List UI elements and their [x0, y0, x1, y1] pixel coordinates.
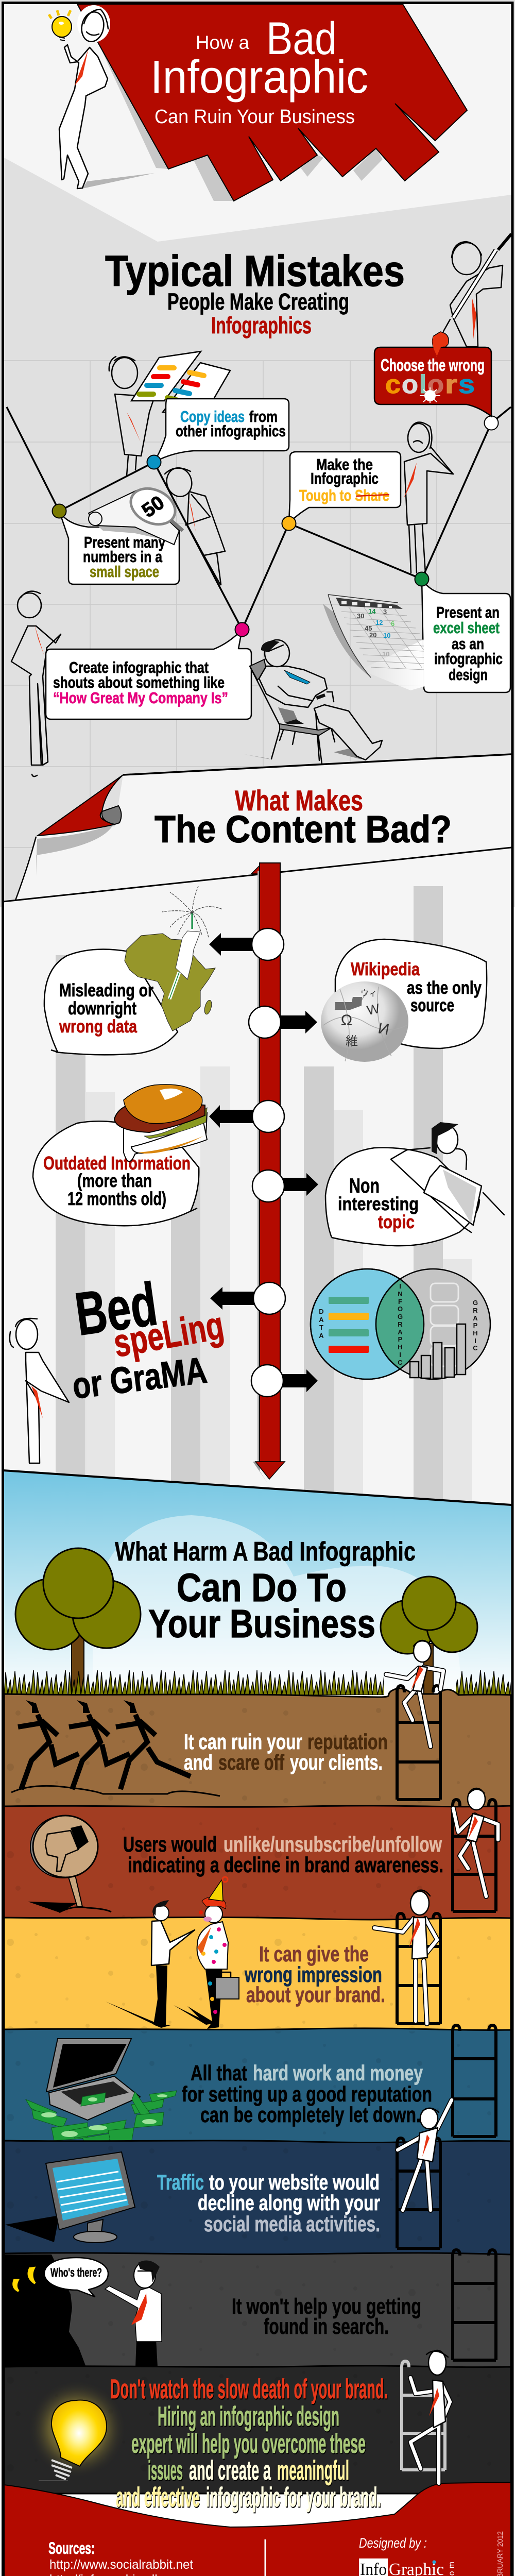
panel: content section background: [3, 848, 511, 1510]
icon: spreadsheet calendar: 14: [368, 607, 376, 615]
panel: what makes the content bad: What Makes: [235, 784, 363, 817]
figure: man with glasses: [105, 2261, 162, 2367]
callout: copy ideas: other infographics: [176, 422, 286, 440]
figure: clown with briefcase: [187, 1877, 239, 2029]
callout: wikipedia: Wikipedia: [351, 959, 420, 979]
panel: blue band hard work: for setting up a good reputation: [182, 2082, 432, 2106]
callout: non interesting topic: topic: [378, 1211, 415, 1232]
figure: man with light bulb: [49, 5, 154, 189]
text: bed speling or grama: Bed: [71, 1270, 161, 1349]
panel: gray band search: [4, 2253, 511, 2370]
callout: wikipedia: source: [410, 995, 454, 1015]
icon: red page curl: [38, 775, 123, 836]
panel: brown band reputation: and: [184, 1750, 213, 1774]
callout: choose the wrong colors: [374, 336, 491, 416]
callout: make tough to share: Tough to Share: [299, 486, 389, 504]
callout: how great my company is: shouts about something like: [53, 673, 225, 691]
figure: man on ladder, brown band: [386, 1640, 443, 1747]
panel: gray band search: found in search.: [264, 2314, 389, 2339]
panel: what makes the content bad: The Content Bad?: [154, 808, 452, 851]
heading: typical mistakes: Typical Mistakes: [105, 247, 405, 295]
callout: choose the wrong colors: o: [427, 370, 444, 399]
icon: spreadsheet calendar: 10: [383, 632, 390, 639]
panel: yellow band wrong impression: about your brand.: [246, 1982, 385, 2007]
figure: man thumbs up: [410, 2350, 450, 2483]
heading: what harm: Your Business: [148, 1602, 375, 1646]
heading: what harm: [115, 1537, 416, 1646]
icon: newspaper with colored bars: [131, 351, 230, 412]
icon: thumbs down sign: [28, 1816, 111, 1912]
panel: navy band traffic: [4, 2141, 511, 2259]
callout: misleading data: downright: [68, 998, 136, 1019]
figure: man on ladder, navy band: [398, 2100, 452, 2210]
panel: rust band brand awareness: Users would: [123, 1832, 217, 1856]
icon: scroll with magnifier: 50: [138, 492, 168, 522]
panel: blue band hard work: [4, 2028, 511, 2143]
icon: spreadsheet calendar: 20: [369, 631, 376, 639]
figure: man on ladder, yellow band: [374, 1890, 437, 2024]
text: final message: meaningful: [277, 2455, 349, 2486]
panel: yellow band wrong impression: [4, 1877, 511, 2032]
title banner: How a: [196, 32, 249, 53]
icon: scroll with magnifier: [89, 482, 183, 545]
panel: blue band hard work: All that: [191, 2061, 247, 2085]
callout: choose the wrong colors: s: [458, 370, 475, 399]
callout: present excel sheet: [422, 579, 510, 692]
chart: venn diagram: H: [473, 1329, 478, 1337]
icon: wikipedia globe: W: [366, 1001, 381, 1018]
callout: present excel sheet: design: [449, 666, 488, 684]
chart: venn diagram: G: [398, 1313, 403, 1320]
figure: businessman facing clown: [106, 1900, 211, 2028]
chart: venn diagram: F: [398, 1298, 402, 1306]
footer: designed by logo: [359, 2535, 456, 2576]
heading: what harm: What Harm A Bad Infographic: [115, 1537, 416, 1567]
text: bed speling or grama: or GraMA: [70, 1350, 209, 1407]
chart: venn diagram: A: [319, 1332, 324, 1340]
panel: yellow band wrong impression: It can give the: [259, 1942, 369, 1966]
panel: rust band brand awareness: [4, 1806, 511, 1922]
icon: wikipedia globe: 維: [346, 1035, 358, 1048]
figure: man thinking: [404, 422, 453, 573]
panel: sky background: [3, 1470, 511, 1700]
chart: venn diagram: R: [398, 1320, 403, 1328]
panel: navy band traffic: social media activities.: [204, 2212, 380, 2236]
panel: title area background: [0, 0, 515, 907]
icon: glowing eyes: [13, 2268, 35, 2291]
callout: non interesting topic: Non: [349, 1175, 380, 1197]
ladders: [397, 1686, 496, 2470]
icon: sandwich: [114, 1084, 207, 1161]
panel: brown band reputation: your clients.: [290, 1750, 383, 1774]
icon: africa map with weasel and palm: [125, 886, 222, 1031]
panel: brown band reputation: It can ruin your: [184, 1730, 302, 1754]
callout: make tough to share: [289, 452, 401, 523]
callout: choose the wrong colors: l: [419, 370, 426, 399]
icon: spreadsheet calendar: 3: [383, 608, 387, 616]
icon: wikipedia globe: [321, 981, 408, 1062]
title banner: Infographic: [150, 52, 368, 103]
callout: how great my company is: Create infographic that: [69, 658, 209, 676]
panel: brown band reputation: [4, 1688, 511, 1808]
icon: spreadsheet calendar: [323, 595, 425, 690]
title banner: Can Ruin Your Business: [154, 106, 355, 128]
icon: right tree: [381, 1577, 477, 1695]
chart: venn diagram: A: [473, 1314, 478, 1322]
icon: wikipedia globe: ウィ: [360, 989, 377, 998]
panel: navy band traffic: Traffic: [157, 2170, 204, 2194]
panel: brown band reputation: scare off: [218, 1750, 285, 1774]
callout: present many numbers: Present many: [84, 533, 166, 551]
callout: non interesting topic: [325, 1148, 479, 1246]
chart: venn diagram: I: [399, 1351, 401, 1359]
figure: confused man: [10, 1318, 69, 1463]
callout: present many numbers: numbers in a: [83, 548, 163, 566]
chart: venn diagram: A: [319, 1316, 324, 1324]
icon: left tree: [15, 1548, 141, 1695]
figure: painter with brush: [433, 234, 511, 355]
icon: open briefcase with money: [26, 2039, 177, 2143]
callout: present excel sheet: as an: [452, 635, 484, 653]
chart: venn diagram: R: [473, 1307, 478, 1314]
icon: computer monitor: [5, 2152, 135, 2243]
panel: navy band traffic: to your website would: [209, 2170, 380, 2194]
title banner: Bad: [266, 12, 337, 64]
callout: choose the wrong colors: r: [445, 370, 457, 399]
heading: typical mistakes: People Make Creating: [167, 289, 349, 315]
panel: gray band search: It won't help you getting: [232, 2294, 421, 2319]
panel: what makes the content bad: [3, 754, 511, 902]
callout: copy ideas: from: [249, 408, 278, 426]
text: final message: and effective: [116, 2482, 200, 2513]
chart: venn diagram: H: [398, 1343, 403, 1351]
callout: outdated information: 12 months old): [67, 1188, 166, 1209]
chart: venn diagram: D: [319, 1308, 324, 1315]
callout: how great my company is: “How Great My Company Is”: [53, 689, 228, 707]
callout: make tough to share: Infographic: [311, 469, 379, 487]
chart: venn diagram: G: [473, 1299, 478, 1307]
footer: designed by logo: Designed by :: [359, 2535, 427, 2551]
callout: how great my company is: [46, 630, 251, 719]
callout: outdated information: Outdated Information: [43, 1153, 191, 1174]
figure: man standing left: [11, 591, 61, 776]
arrows and circles on timeline: [209, 928, 318, 1397]
text: bed speling or grama: [70, 1270, 227, 1407]
chart: venn diagram: [311, 1269, 490, 1379]
callout: wikipedia: as the only: [407, 978, 482, 998]
callout: misleading data: [44, 949, 178, 1055]
divider: [265, 2539, 266, 2576]
footer: sources: [48, 2539, 193, 2576]
chart: venn diagram: P: [473, 1321, 478, 1329]
heading: typical mistakes: [105, 247, 405, 338]
callout: copy ideas: [154, 399, 289, 462]
heading: typical mistakes: Infographics: [211, 312, 312, 338]
text: bed speling or grama: speLing: [110, 1303, 227, 1366]
callout: wikipedia: [321, 939, 487, 1062]
footer: sources: Sources:: [48, 2539, 95, 2557]
figure: man with magnifier: [164, 465, 225, 585]
text: final message: issues: [148, 2455, 183, 2486]
icon: light bulb: [49, 10, 72, 41]
panel: yellow band wrong impression: wrong impression: [244, 1962, 382, 1987]
callout: choose the wrong colors: o: [402, 370, 418, 399]
chart: venn diagram: T: [319, 1324, 323, 1331]
chart: venn diagram: C: [473, 1344, 478, 1352]
chart: venn diagram: C: [398, 1359, 403, 1366]
callout: copy ideas: Copy ideas: [180, 408, 245, 426]
callout: who's there: Who's there?: [50, 2266, 102, 2280]
figure: man on ladder, rust band: [453, 1788, 498, 1896]
chart: background bars: [56, 886, 472, 1506]
icon: wikipedia globe: И: [376, 1020, 390, 1039]
panel: blue band hard work: can be completely let down.: [200, 2103, 421, 2127]
icon: glowing light bulb: [28, 2380, 126, 2481]
panel: brown band reputation: reputation: [307, 1730, 388, 1754]
callout: outdated information: (more than: [77, 1170, 152, 1191]
icon: wikipedia globe: Ω: [341, 1012, 352, 1029]
chart: venn diagram: I: [399, 1282, 401, 1290]
icon: spreadsheet calendar: 10: [382, 650, 389, 658]
text: final message: [110, 2374, 388, 2513]
callout: choose the wrong colors: c: [385, 370, 401, 399]
chart: venn diagram: O: [398, 1305, 403, 1313]
icon: spreadsheet calendar: 30: [357, 612, 364, 620]
icon: spreadsheet calendar: 45: [365, 624, 372, 632]
callout: make tough to share: Make the: [316, 455, 373, 473]
heading: what harm: Can Do To: [177, 1566, 347, 1610]
node: colored dots: [53, 416, 499, 637]
title banner: [77, 4, 467, 201]
callout: misleading data: wrong data: [59, 1016, 137, 1037]
panel: blue band hard work: hard work and money: [253, 2061, 423, 2085]
callout: present many numbers: [59, 511, 179, 584]
chart: venn diagram: A: [398, 1328, 403, 1336]
icon: running silhouettes: [11, 1700, 220, 1796]
icon: spreadsheet calendar: 6: [391, 620, 394, 628]
timeline: red vertical bar: [251, 863, 285, 1483]
figure: man with newspaper: [109, 351, 230, 476]
figure: bored man in chair: [391, 1122, 504, 1232]
icon: spreadsheet calendar: 12: [375, 619, 383, 626]
panel: red footer: [4, 2482, 511, 2576]
callout: outdated information: [33, 1121, 199, 1226]
callout: non interesting topic: interesting: [338, 1193, 419, 1214]
text: final message: and create a: [189, 2455, 271, 2486]
panel: navy band traffic: decline along with your: [198, 2191, 380, 2215]
grass: [4, 1669, 511, 1695]
chart: venn diagram: N: [398, 1290, 403, 1298]
callout: present many numbers: small space: [90, 563, 159, 581]
figure: man relaxing in chair: [244, 640, 382, 764]
grid lines: [4, 361, 511, 907]
panel: rust band brand awareness: unlike/unsubscribe/unfollow: [224, 1832, 442, 1856]
chart: venn diagram: I: [474, 1337, 476, 1345]
footer: sources: http://www.socialrabbit.net: [49, 2557, 193, 2572]
panel: dark band conclusion: [4, 2366, 511, 2494]
callout: misleading data: Misleading or: [59, 980, 153, 1001]
chart: venn diagram: P: [398, 1335, 403, 1343]
callout: who's there: [44, 2258, 108, 2297]
graph line with nodes: [7, 407, 511, 630]
